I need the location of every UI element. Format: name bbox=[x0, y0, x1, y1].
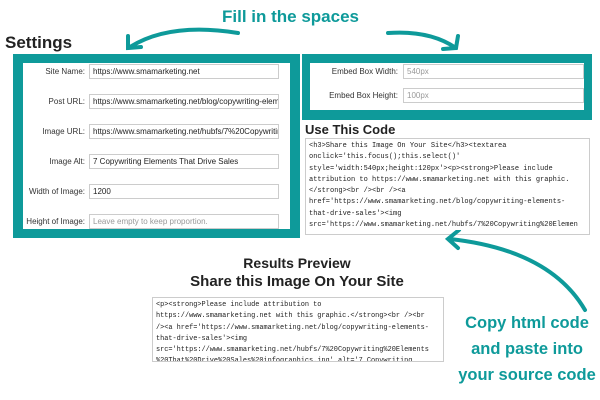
code box: embed code: <h3>Share this Image On Your Site</h3><textarea onclick='this.focus();this.select()' style='width:540px;height:120px'><p><strong>Please include attribution to https://www.smamarketing.net with this graphic. </strong><br /><br /><a href='https://www.smamarketing.net/blog/copywriting-elements- that-drive-sales'><img src='https://www.smamarketing.net/hubfs/7%20Copywriting%20Elemen bbox=[309, 142, 578, 229]
callout: copy html code: your source code bbox=[458, 366, 596, 384]
callout: copy html code: Copy html code bbox=[465, 314, 589, 332]
heading: Results Preview bbox=[190, 255, 404, 290]
panel: settings form: Leave empty to keep proportion. bbox=[93, 217, 208, 226]
heading: Settings: Settings bbox=[5, 33, 72, 52]
panel: embed box: 100px bbox=[407, 91, 429, 100]
panel: embed box: 540px bbox=[407, 67, 429, 76]
arrow: left bbox=[128, 30, 238, 48]
panel: settings form: Post URL: bbox=[49, 97, 85, 106]
panel: settings form: Image URL: bbox=[42, 127, 85, 136]
callout: copy html code: and paste into bbox=[471, 340, 583, 358]
panel: settings form: 1200 bbox=[93, 187, 111, 196]
panel: settings form bbox=[13, 54, 300, 238]
callout: copy html code bbox=[458, 314, 596, 384]
arrow: right bbox=[388, 33, 458, 49]
panel: embed box: Embed Box Width: bbox=[332, 67, 398, 76]
title: Fill in the spaces: Fill in the spaces bbox=[222, 7, 359, 26]
panel: embed box bbox=[302, 54, 592, 120]
panel: settings form: Height of Image: bbox=[26, 217, 85, 226]
heading: Results Preview: Results Preview bbox=[243, 255, 351, 271]
panel: settings form: Image Alt: bbox=[49, 157, 85, 166]
heading: Use This Code: Use This Code bbox=[305, 122, 395, 137]
panel: settings form: 7 Copywriting Elements That Drive Sales bbox=[93, 157, 238, 166]
arrows: fill in bbox=[126, 28, 460, 51]
heading: Results Preview: Share this Image On Your Site bbox=[190, 273, 404, 290]
panel: settings form: Width of Image: bbox=[29, 187, 85, 196]
arrow: copy code bbox=[445, 230, 588, 312]
panel: settings form: https://www.smamarketing.net bbox=[93, 67, 200, 76]
panel: embed box: Embed Box Height: bbox=[329, 91, 398, 100]
panel: settings form: Site Name: bbox=[45, 67, 85, 76]
